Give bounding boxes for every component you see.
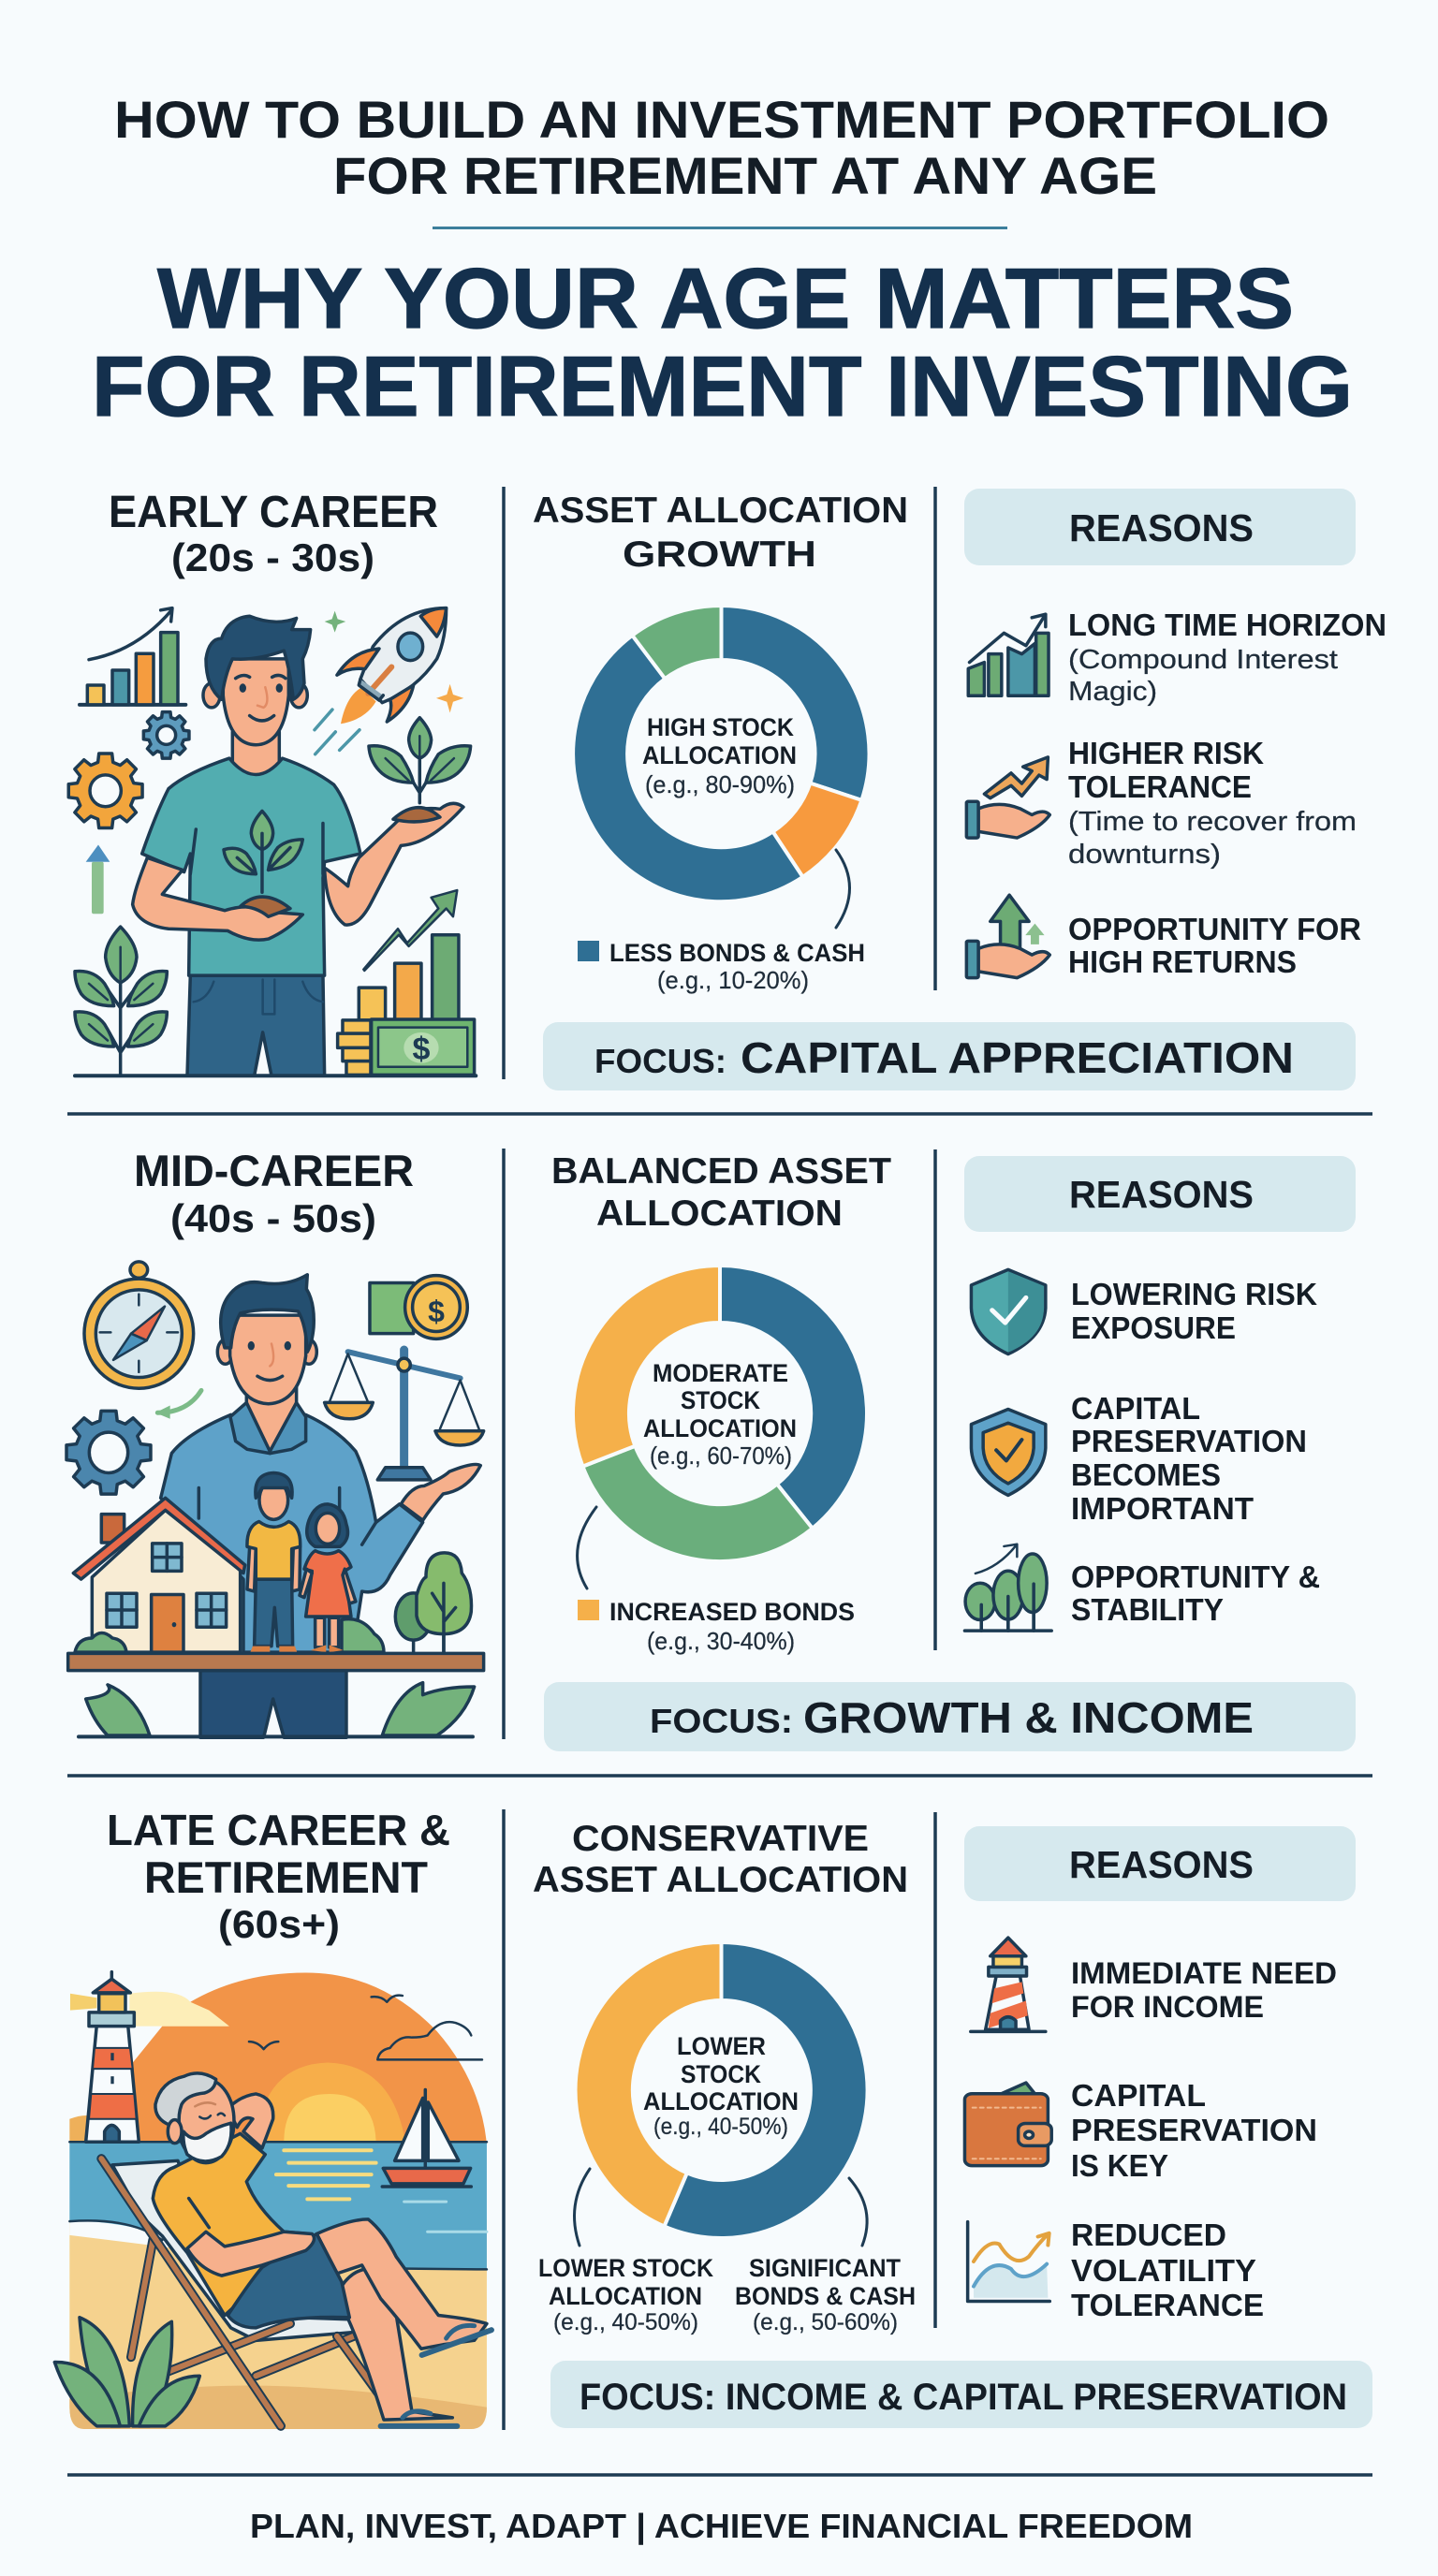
reason: higher risk tolerance: downturns) [1068, 840, 1221, 870]
focus banner: capital appreciation [543, 1022, 1356, 1090]
reason: reduced volatility tolerance: VOLATILITY [1071, 2253, 1256, 2288]
panel: balanced asset allocation [551, 1151, 891, 1655]
reason: lowering risk exposure: EXPOSURE [1071, 1310, 1236, 1345]
illustration: parent with family, house, scales [66, 1262, 484, 1737]
label: significant bonds and cash [735, 2254, 916, 2335]
reason: capital preservation is key [964, 2078, 1317, 2183]
heading: balanced asset allocation: ALLOCATION [596, 1193, 843, 1234]
icon: dollar on coin: $ [428, 1295, 445, 1328]
reason: reduced volatility tolerance: REDUCED [1071, 2217, 1226, 2252]
heading: early career: EARLY CAREER [109, 488, 438, 537]
focus banner: growth and income [544, 1682, 1356, 1751]
donut center label: ALLOCATION [643, 2087, 799, 2115]
heading: mid career: (40s - 50s) [170, 1196, 376, 1240]
panel: asset allocation growth [533, 490, 908, 994]
label: significant bonds and cash: BONDS & CASH [735, 2282, 916, 2310]
focus banner: income and capital preservation: FOCUS: INCOME & CAPITAL PRESERVATION [580, 2377, 1347, 2418]
heading: balanced asset allocation: BALANCED ASSET [551, 1151, 891, 1192]
reason: higher risk tolerance [966, 736, 1357, 870]
main title [114, 90, 1329, 205]
reason: capital preservation: IMPORTANT [1071, 1491, 1254, 1526]
donut center label [643, 2032, 799, 2140]
title rule [433, 227, 1007, 229]
connector line [578, 1507, 596, 1588]
label: significant bonds and cash: SIGNIFICANT [749, 2254, 901, 2282]
heading: early career [109, 488, 438, 579]
label: significant bonds and cash: (e.g., 50-60%) [753, 2309, 898, 2335]
heading: late career and retirement: RETIREMENT [144, 1852, 428, 1902]
section divider 1 [67, 1112, 1372, 1116]
heading: late career and retirement [107, 1806, 450, 1946]
heading: conservative asset allocation: ASSET ALLOCATION [533, 1860, 908, 1900]
icon: orange shield [971, 1410, 1046, 1495]
heading: mid career [134, 1146, 414, 1240]
panel: mid career reasons [964, 1156, 1356, 1631]
icon: wallet [964, 2083, 1051, 2166]
donut center label: MODERATE [653, 1359, 788, 1387]
legend: less bonds and cash: (e.g., 10-20%) [657, 966, 809, 994]
donut center label: STOCK [681, 1386, 760, 1414]
donut chart: conservative allocation [576, 1942, 868, 2238]
donut chart: growth allocation [573, 606, 869, 901]
reason: higher risk tolerance: TOLERANCE [1068, 769, 1252, 804]
focus banner: growth and income: GROWTH & INCOME [803, 1693, 1254, 1742]
reason: capital preservation is key: PRESERVATION [1071, 2113, 1317, 2147]
reason: capital preservation: CAPITAL [1071, 1391, 1200, 1426]
reason: capital preservation [971, 1391, 1307, 1526]
main title: FOR RETIREMENT AT ANY AGE [333, 146, 1157, 205]
reason: immediate need for income [971, 1938, 1337, 2031]
reasons header [964, 1156, 1356, 1232]
main title: HOW TO BUILD AN INVESTMENT PORTFOLIO [114, 90, 1329, 149]
panel divider: allocation [933, 487, 937, 990]
section divider 2 [67, 1774, 1372, 1778]
reason: lowering risk exposure: LOWERING RISK [1071, 1277, 1317, 1311]
label: lower stock allocation: (e.g., 40-50%) [553, 2309, 698, 2335]
subtitle: FOR RETIREMENT INVESTING [92, 340, 1353, 434]
reasons header: REASONS [1069, 1843, 1254, 1886]
reason: capital preservation: BECOMES [1071, 1457, 1221, 1492]
connector lines [575, 2169, 867, 2246]
focus banner: income and capital preservation [550, 2361, 1372, 2428]
reason: long time horizon: Magic) [1068, 677, 1157, 707]
reason: opportunity and stability [964, 1544, 1320, 1631]
heading: conservative asset allocation [533, 1819, 908, 1900]
donut center label: STOCK [681, 2060, 761, 2088]
reason: capital preservation is key: IS KEY [1071, 2148, 1168, 2183]
heading: asset allocation growth: ASSET ALLOCATION [533, 490, 908, 531]
subtitle [92, 252, 1353, 434]
legend: increased bonds [578, 1598, 855, 1655]
reason: higher risk tolerance: (Time to recover from [1068, 807, 1357, 837]
heading: balanced asset allocation [551, 1151, 891, 1234]
reason: opportunity and stability: STABILITY [1071, 1592, 1224, 1627]
reason: reduced volatility tolerance [968, 2217, 1264, 2322]
reason: reduced volatility tolerance: TOLERANCE [1071, 2288, 1264, 2322]
reasons header: REASONS [1069, 506, 1254, 549]
reason: long time horizon: (Compound Interest [1068, 645, 1338, 675]
label: lower stock allocation: ALLOCATION [549, 2282, 702, 2310]
heading: mid career: MID-CAREER [134, 1146, 414, 1195]
icon: line chart [968, 2222, 1049, 2301]
heading: conservative asset allocation: CONSERVATIVE [572, 1819, 869, 1859]
donut center label: LOWER [677, 2032, 766, 2060]
panel: early career reasons [964, 489, 1387, 979]
panel: early career [68, 488, 476, 1076]
legend: increased bonds: INCREASED BONDS [609, 1598, 855, 1626]
panel divider: early career [502, 487, 506, 1079]
reason: immediate need for income: IMMEDIATE NEED [1071, 1956, 1337, 1990]
reason: long time horizon: LONG TIME HORIZON [1068, 607, 1387, 642]
donut center label: HIGH STOCK [647, 713, 794, 741]
panel: mid career [66, 1146, 484, 1737]
subtitle: WHY YOUR AGE MATTERS [157, 252, 1294, 346]
heading: asset allocation growth: GROWTH [623, 534, 816, 575]
reasons header: REASONS [1069, 1173, 1254, 1216]
heading: early career: (20s - 30s) [171, 535, 374, 579]
icon: lighthouse [971, 1938, 1046, 2031]
reason: opportunity for high returns: OPPORTUNITY FOR [1068, 912, 1361, 946]
icon: dollar sign on bill: $ [413, 1032, 431, 1067]
donut center label: ALLOCATION [642, 741, 797, 769]
label: lower stock allocation [538, 2254, 713, 2335]
legend: less bonds and cash [578, 939, 865, 994]
label: lower stock allocation: LOWER STOCK [538, 2254, 713, 2282]
icon: hand with up arrow [966, 895, 1049, 978]
donut center label: (e.g., 40-50%) [653, 2114, 788, 2140]
reason: opportunity and stability: OPPORTUNITY & [1071, 1559, 1320, 1594]
reasons header [964, 1826, 1356, 1901]
donut center label: (e.g., 60-70%) [650, 1442, 792, 1470]
heading: late career and retirement: LATE CAREER & [107, 1806, 450, 1854]
reason: immediate need for income: FOR INCOME [1071, 1990, 1264, 2024]
icon: hand with rising arrow [966, 757, 1049, 838]
title block [92, 90, 1353, 434]
icon: three trees [964, 1544, 1051, 1631]
donut chart: balanced allocation [573, 1266, 867, 1561]
donut center label: ALLOCATION [643, 1414, 797, 1442]
focus banner: capital appreciation: CAPITAL APPRECIATION [741, 1033, 1294, 1082]
panel divider: conservative allocation [933, 1812, 937, 2328]
panel divider: mid career [502, 1149, 506, 1739]
footer rule [67, 2473, 1372, 2477]
panel divider: late career [502, 1809, 506, 2430]
donut center label [643, 1359, 797, 1470]
illustration: retiree on beach chair at sunset [54, 1972, 492, 2429]
focus banner: growth and income: FOCUS: [650, 1702, 793, 1740]
reason: lowering risk exposure [971, 1269, 1317, 1354]
donut center label [642, 713, 797, 798]
reason: higher risk tolerance: HIGHER RISK [1068, 736, 1264, 770]
panel: late career and retirement [54, 1806, 492, 2429]
reasons header [964, 489, 1356, 565]
legend: less bonds and cash: LESS BONDS & CASH [609, 939, 865, 967]
illustration: young man with plants, rocket and charts [68, 608, 476, 1076]
legend: increased bonds: (e.g., 30-40%) [647, 1627, 795, 1655]
reason: opportunity for high returns: HIGH RETURNS [1068, 944, 1297, 979]
panel: retirement reasons [964, 1826, 1356, 2322]
connector line [836, 850, 850, 928]
footer tagline: PLAN, INVEST, ADAPT | ACHIEVE FINANCIAL FREEDOM [250, 2507, 1193, 2546]
reason: capital preservation: PRESERVATION [1071, 1424, 1307, 1458]
reason: long time horizon [968, 607, 1387, 707]
focus banner: capital appreciation: FOCUS: [594, 1042, 726, 1080]
icon: teal shield [971, 1269, 1046, 1354]
icon: growth chart [968, 614, 1049, 695]
reason: opportunity for high returns [966, 895, 1361, 979]
panel: conservative asset allocation [533, 1819, 916, 2335]
heading: late career and retirement: (60s+) [218, 1902, 340, 1946]
reason: capital preservation is key: CAPITAL [1071, 2078, 1206, 2113]
donut center label: (e.g., 80-90%) [645, 770, 795, 798]
panel divider: balanced allocation [933, 1149, 937, 1650]
heading: asset allocation growth [533, 490, 908, 575]
